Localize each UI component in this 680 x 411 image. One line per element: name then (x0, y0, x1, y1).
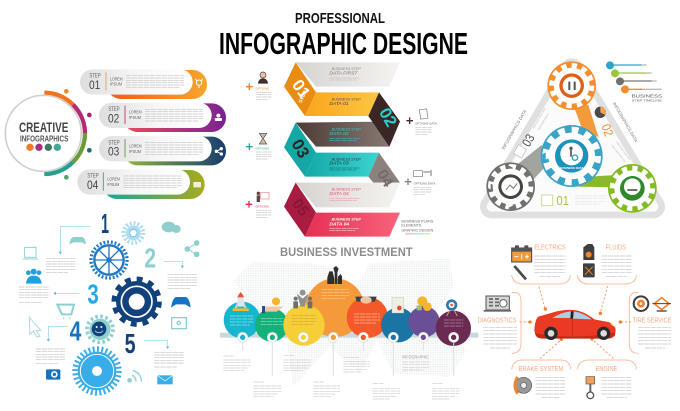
step 4 pill: IPSUM (107, 182, 119, 188)
ribbon section 03: 03 (288, 136, 313, 161)
icon: spark plug (514, 266, 526, 279)
icon: brake disc (515, 377, 532, 394)
heading: BUSINESS INVESTMENT (280, 245, 413, 259)
icon: cursor (29, 317, 41, 337)
fluids heading: FLUIDS (606, 242, 626, 251)
step 1 pill: 01 (89, 78, 100, 92)
grey gear (486, 162, 535, 211)
text: fluids (602, 256, 632, 277)
panel: car service (478, 242, 671, 399)
ribbon section 01: 01 (288, 76, 314, 102)
text: electrics (534, 256, 566, 277)
ribbon section 05: BUSINESS STEP (332, 218, 361, 222)
bracket frames (512, 275, 638, 369)
smiley gear (87, 316, 113, 342)
maroon circle (436, 299, 471, 346)
step 2 pill (99, 103, 226, 132)
spoked gear (91, 242, 127, 278)
diagnostics heading: DIAGNOSTICS (478, 315, 516, 324)
step 02: 02 (599, 122, 616, 138)
number 3: 3 (87, 278, 99, 309)
step 3 pill: IPSUM (129, 149, 141, 155)
ribbon section 01: STEP (298, 89, 309, 104)
world map dots (233, 258, 467, 387)
panel: isometric ribbon data (246, 62, 437, 237)
text block 6 (373, 384, 400, 399)
arrow heads (47, 252, 184, 349)
step 03 (513, 108, 548, 158)
title: professional: PROFESSIONAL (295, 10, 385, 27)
timeline legend: BUSINESS (632, 94, 663, 100)
business plans caption (401, 220, 434, 234)
orange circle (306, 266, 364, 337)
ribbon section 02: 02 (375, 104, 401, 130)
electrics heading: ELECTRICS (534, 242, 566, 251)
sky blue gear (75, 349, 119, 393)
ribbon section 04: BUSINESS STEP (332, 188, 361, 192)
panel: business investment (220, 245, 478, 399)
ribbon section 03 (284, 123, 379, 177)
text block 3 (283, 356, 311, 370)
ribbon section 05 (284, 183, 400, 237)
text block 5 (154, 352, 184, 367)
right edge label: INFOGRAPHICS DATA (612, 101, 639, 143)
dashed links (520, 286, 631, 358)
ribbon section 01: BUSINESS STEP (332, 97, 361, 101)
step 03: 03 (519, 132, 538, 149)
number 4: 4 (70, 315, 82, 346)
central badge: CREATIVE (19, 119, 68, 135)
text: engine (602, 377, 632, 398)
icon: share (185, 241, 199, 257)
panel: blue gears numbered (19, 208, 199, 393)
ribbon section 02: BUSINESS STEP (332, 128, 361, 132)
blue central gear: BUSINESS DATA (560, 166, 584, 170)
business plans caption: BUSINESS PLANS (401, 220, 434, 224)
text block 4 (313, 382, 340, 397)
engine heading: ENGINE (596, 364, 617, 373)
step 4 pill (77, 169, 205, 199)
ribbon section 02 (296, 92, 401, 147)
ribbon section 04: 04 (373, 167, 397, 191)
triangle frame (492, 70, 653, 207)
number 1: 1 (101, 208, 109, 239)
icon: envelope (157, 375, 173, 384)
option left 2 (246, 133, 271, 159)
connector arms (517, 105, 617, 187)
title: infographic designe: INFOGRAPHIC DESIGNE (219, 26, 468, 61)
business plans caption: GRAPHIC DESIGN (401, 229, 434, 233)
text block 8 (432, 384, 459, 399)
icon: camera (46, 369, 60, 380)
step 2 pill: STEP (108, 107, 120, 113)
panel: triangular gear diagram (486, 61, 663, 213)
option right 1 (406, 109, 437, 134)
light gear (124, 223, 143, 243)
ribbon section 05: 05 (288, 196, 312, 220)
icon: blue controller (171, 297, 191, 308)
icon: piston (586, 377, 595, 399)
green circle (255, 297, 288, 342)
red-orange circle (347, 296, 388, 338)
left edge label: INFOGRAPHICS DATA (501, 109, 527, 150)
ribbon section 01: BUSINESS STEP (332, 67, 361, 71)
step 3 pill: LOREM (129, 144, 142, 150)
icon: game controller (69, 237, 86, 244)
brake system heading: BRAKE SYSTEM (519, 364, 563, 373)
ring accent dots (64, 89, 92, 180)
step 02 (595, 107, 630, 162)
step 3 pill: 03 (108, 145, 119, 159)
blue circle (381, 297, 416, 342)
timeline legend (606, 61, 663, 102)
yellow circle (283, 290, 325, 346)
icon: jerrycan (583, 263, 595, 277)
icon: shopping cart (57, 305, 74, 318)
icon: tire (634, 296, 648, 311)
step 4 pill: LOREM (107, 177, 120, 183)
step 3 pill (99, 136, 226, 165)
central badge (5, 95, 81, 171)
ribbon section 02: DATA 02 (329, 131, 349, 137)
timeline nodes (238, 332, 459, 342)
ribbon section 01 (284, 62, 400, 116)
step 1 pill: LOREM (110, 76, 123, 82)
cyan circle (224, 292, 260, 338)
ribbon section 01: DATA 01 (329, 101, 349, 107)
green gear (608, 164, 657, 213)
blue central gear (541, 125, 603, 187)
text block 1 (223, 356, 251, 370)
step 1 pill: IPSUM (110, 82, 122, 88)
infographic text block (402, 354, 430, 370)
step 4 pill: 04 (87, 178, 98, 192)
timeline legend: STEP TIMELINE (632, 98, 662, 102)
orange gear (547, 61, 596, 110)
ribbon section 04: DATA 04 (329, 191, 349, 197)
step 3 pill: STEP (108, 140, 120, 146)
ribbon section 03: BUSINESS STEP (332, 157, 361, 161)
option left 2: OPTIONS (256, 146, 269, 150)
panel: creative infographics steps (5, 69, 226, 199)
infographic text block: INFOGRAPHIC (402, 354, 430, 359)
drop lines (243, 342, 454, 376)
icon: battery (512, 245, 532, 262)
text: brake system (536, 377, 566, 398)
step 01 (542, 193, 607, 208)
option right 2 (405, 170, 435, 194)
step 1 pill (80, 69, 207, 99)
baseline band (220, 333, 478, 338)
text: diagnostics (483, 327, 517, 348)
purple circle (408, 296, 440, 337)
option left 1: OPTIONS (256, 87, 269, 91)
text block 5 (343, 357, 370, 372)
text block 2 (168, 275, 197, 288)
icon: car jack (652, 298, 671, 311)
business plans caption: ELEMENTS (401, 223, 422, 227)
ribbon section 04 (296, 153, 400, 207)
step 2 pill: IPSUM (129, 115, 141, 121)
text block 3 (19, 287, 49, 302)
number 2: 2 (144, 243, 156, 274)
icon: speech bubbles (162, 222, 181, 233)
number 5: 5 (125, 328, 136, 359)
connector arrows (48, 226, 182, 347)
icon: screen (172, 318, 186, 329)
text block 2 (253, 382, 281, 397)
ribbon section 05: DATA 04 (329, 221, 349, 227)
step 1 pill: STEP (89, 74, 101, 80)
icon: laptop diagnostics (484, 296, 511, 312)
link dots (528, 307, 622, 341)
step 4 pill: STEP (87, 173, 99, 179)
car illustration (534, 310, 616, 340)
step 2 pill: 02 (108, 111, 119, 125)
step 2 pill: LOREM (129, 110, 142, 116)
node centres (240, 335, 456, 340)
navy gear (114, 279, 159, 324)
text: tire service (638, 327, 671, 348)
central badge: INFOGRAPHICS (20, 134, 68, 144)
ribbon section 03: DATA 03 (329, 161, 349, 167)
text block 1 (46, 259, 76, 272)
option left 1 (246, 72, 271, 99)
option right 1: OPTIONS DATA (415, 122, 437, 126)
option left 3 (246, 192, 271, 217)
ribbon section 01: DATA FIRST (329, 71, 358, 77)
icon: wifi (128, 370, 141, 382)
icon: people (26, 269, 42, 284)
option right 2: OPTIONS DATA (414, 182, 435, 186)
option left 3: OPTIONS (255, 204, 269, 208)
icon: laptop (23, 247, 38, 259)
step 01: 01 (556, 193, 569, 208)
text block 4 (36, 349, 65, 363)
icon: oil can (583, 244, 594, 260)
segmented ring (44, 93, 85, 174)
